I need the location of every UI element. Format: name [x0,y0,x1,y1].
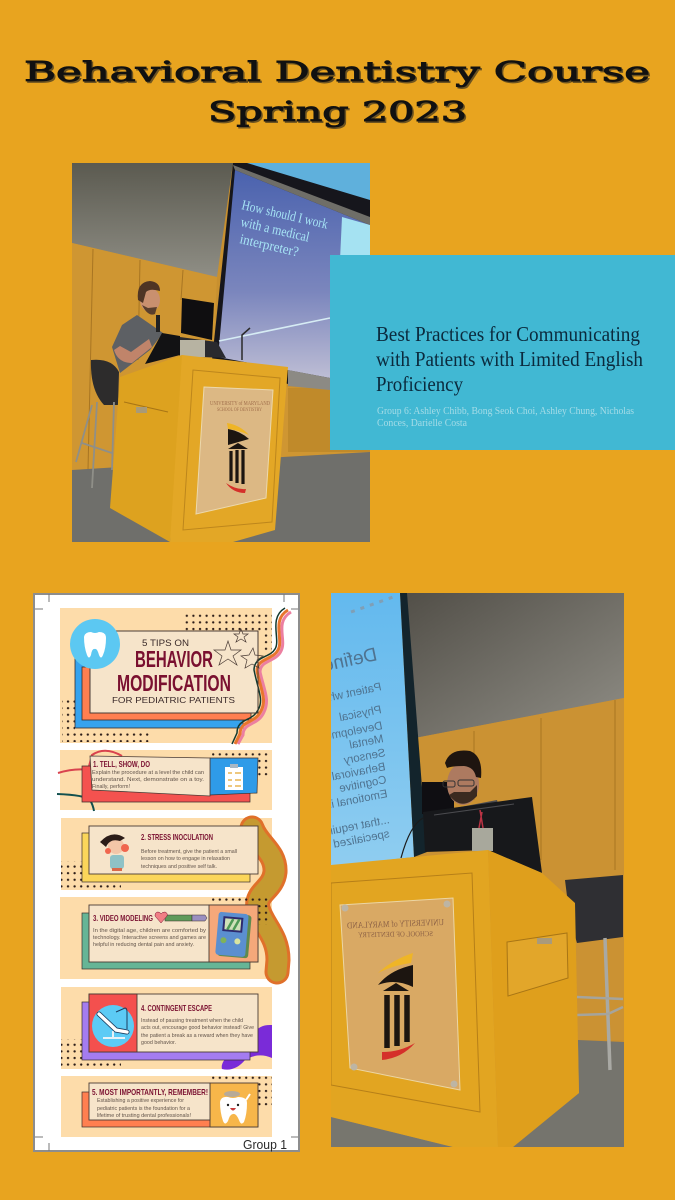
presenter [112,281,163,373]
tip 4 text: Instead of pausing treatment when the child [141,1018,243,1024]
slide card: best practices [330,255,675,450]
tip 3 text: helpful in reducing dental pain and anxiety. [93,942,194,948]
slide text [239,200,328,256]
icon: clipboard [225,764,243,790]
ribbon [232,608,291,744]
black wall panel [181,298,214,340]
group label: Group 1 [243,1138,287,1152]
podium [110,355,288,542]
monitor, cup and mic [401,797,542,873]
icon: handheld game [215,912,252,958]
infographic page: 5 tips on behavior modification [34,594,299,1152]
projection screen: Patient who [321,681,383,705]
photo: second presenter at podium [303,593,624,1147]
black wall panel [422,782,454,814]
icon: dental chair [92,1005,134,1047]
icon: stars [214,629,263,668]
plaque [196,387,273,514]
plaque: SCHOOL OF DENTISTRY [357,929,433,939]
photo: presenter at podium with interpreter slide [72,163,370,542]
projection screen: Mental [348,733,385,752]
header text: MODIFICATION [117,670,231,696]
card heading: Best Practices for Communicating [376,322,640,346]
card heading [376,322,643,396]
projection screen: Physical [338,704,383,724]
title [24,57,652,130]
projection screen: Emotional im [321,788,389,813]
stool [76,360,119,488]
panel: tip 3 video modeling [60,897,272,979]
podium [331,850,579,1147]
tip 3 text: technology. Interactive screens and games are [93,935,206,941]
panel: tip 5 most importantly [61,1076,272,1137]
tip 2 text: lesson on how to engage in relaxation [141,856,230,862]
panel: tip 5 most importantly: 5. MOST IMPORTANTLY, REMEMBER! [92,1087,208,1097]
projection screen: specialized ser [313,828,391,854]
panel: tip 1 tell show do [57,750,272,811]
tip 1 text: understand. Next, demonstrate on a toy. [92,777,204,783]
tip 4 text: good behavior. [141,1040,176,1046]
projection screen: Cognitive [338,774,388,795]
tip 3 text: In the digital age, children are comforted by [93,928,206,934]
projection screen: Sensory [343,747,387,767]
icon: heart progress bar [155,912,207,923]
plaque: SCHOOL OF DENTISTRY [217,408,262,413]
tip 2 text: Before treatment, give the patient a small [141,849,237,855]
header text: 5 TIPS ON [142,638,189,648]
projection screen: Behavioral [331,761,387,783]
card heading: with Patients with Limited English [376,347,643,371]
tip 5 text [97,1098,191,1119]
icon: crying child [100,834,129,871]
panel: tip 2 stress inoculation [61,818,272,890]
slide text: with a medical [239,215,311,246]
card heading: Proficiency [376,372,463,396]
tip 4 text: acts out, encourage good behavior instead! Give [141,1025,254,1031]
tip 5 text: pediatric patients is the foundation for a [97,1106,191,1112]
header text: BEHAVIOR [135,646,213,672]
title: Behavioral Dentistry Course [26,58,652,90]
tip 1 text: Finally, perform! [92,784,130,790]
projection screen [331,593,427,865]
slide text: interpreter? [238,232,300,260]
header panel [60,608,291,744]
decorative gold wave [252,828,278,972]
drawer [507,933,568,996]
tip 2 text [141,849,237,870]
icon: tooth [70,619,120,669]
title: Behavioral Dentistry Course [24,57,650,88]
header text: FOR PEDIATRIC PATIENTS [112,695,235,705]
card authors: Conces, Darielle Costa [377,418,468,429]
plaque [340,898,460,1090]
tip 5 text: Establishing a positive experience for [97,1098,184,1104]
projection screen: ...that requires [316,814,391,840]
panel: tip 2 stress inoculation: 2. STRESS INOCULATION [141,832,213,842]
tip 2 text: techniques and positive self talk. [141,864,217,870]
card authors: Group 6: Ashley Chibb, Bong Seok Choi, Ashley Chung, Nicholas [377,406,634,417]
title: Spring 2023 [208,97,467,128]
presenter [442,750,498,807]
panel: tip 3 video modeling: 3. VIDEO MODELING [93,913,153,923]
icon: tooth mascot [220,1091,250,1124]
tip 4 text [141,1018,254,1046]
tip 3 text [93,928,206,948]
tip 1 text: Explain the procedure at a level the child can [92,770,204,776]
plaque: UNIVERSITY of MARYLAND [210,400,271,407]
title: Spring 2023 [210,98,468,130]
panel: tip 4 contingent escape: 4. CONTINGENT ESCAPE [141,1003,212,1013]
panel: tip 4 contingent escape [61,987,272,1070]
projection screen: Define S [303,644,379,680]
slide text: How should I work [240,198,329,233]
tip 1 text [92,770,204,790]
plaque: UNIVERSITY of MARYLAND [346,917,444,930]
tip 5 text: lifetime of trusting dental professionals! [97,1113,191,1119]
card authors [377,406,634,429]
panel: tip 1 tell show do: 1. TELL, SHOW, DO [93,759,150,769]
tip 4 text: the patient a break as a reward when they have [141,1033,253,1039]
stool [565,875,623,1070]
laptop, cup and mic [145,328,250,364]
projection screen: Development [314,720,384,745]
header text [112,638,235,705]
